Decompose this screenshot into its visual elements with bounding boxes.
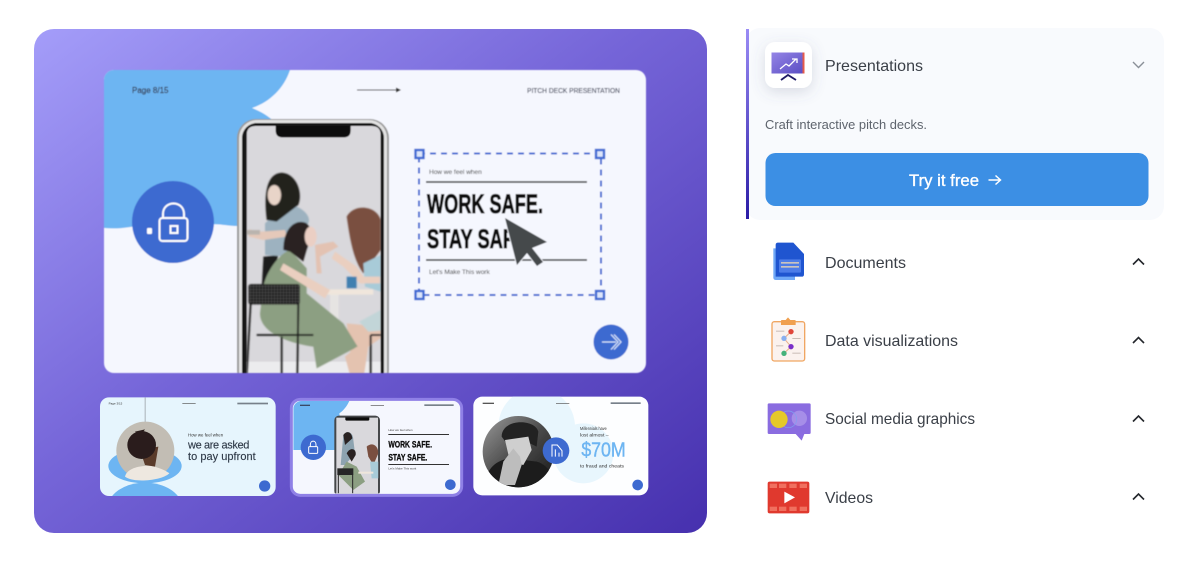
row: Social media graphics: Social media graphics <box>825 411 975 428</box>
notch <box>276 126 351 137</box>
thumbnail heading: we are asked <box>187 439 249 451</box>
arrow: header <box>357 88 401 92</box>
selection text: WORK SAFE. <box>427 189 543 219</box>
icon: padlock circle <box>132 181 214 263</box>
row: Videos: Videos <box>825 490 873 507</box>
thumbnail: asked to pay upfront <box>100 397 276 496</box>
standing woman <box>262 255 278 287</box>
button: Try it free: Try it free <box>909 172 979 190</box>
blue cloud shape <box>104 70 290 228</box>
icon: mouse cursor <box>505 218 547 266</box>
panel: expanded Presentations accordion <box>746 28 1164 220</box>
row: Documents <box>773 243 1144 280</box>
thumbnail: selected work safe slide: How we feel when <box>388 428 413 432</box>
row: Data visualizations <box>772 317 1144 361</box>
thumbnail: $70M lost to fraud: lost almost – <box>580 432 609 437</box>
arrow button <box>594 324 628 360</box>
thumbnail: selected work safe slide: STAY SAFE. <box>388 452 427 462</box>
selection text: How we feel when <box>429 169 482 176</box>
table <box>330 293 339 323</box>
icon: speech bubble <box>768 403 811 441</box>
thumbnail: selected work safe slide: Let's Make This work <box>388 466 417 470</box>
thumbnail: $70M lost to fraud: $70M <box>581 440 626 462</box>
icon: presentation board <box>765 42 812 88</box>
seated woman <box>260 250 358 368</box>
thumbnail: asked to pay upfront: Page 3/15 <box>109 402 123 406</box>
chevron <box>1133 62 1144 68</box>
thumbnail: $70M lost to fraud: Millennials have <box>580 426 607 431</box>
thumbnail: selected work safe slide: WORK SAFE. <box>388 439 432 449</box>
row: Documents: Documents <box>825 255 906 272</box>
description: Craft interactive pitch decks. <box>765 117 927 132</box>
phone with photo of three women <box>237 119 389 393</box>
icon: video film <box>768 482 809 513</box>
row: Data visualizations: Data visualizations <box>825 333 958 350</box>
panel: main slide <box>104 70 646 393</box>
slide header label: PITCH DECK PRESENTATION <box>527 88 620 95</box>
thumbnail: $70M lost to fraud: to fraud and cheats <box>580 464 624 469</box>
right woman <box>347 323 381 375</box>
chair <box>248 284 300 305</box>
button: Try it free <box>766 153 1148 206</box>
page number: Page 8/15 <box>132 86 169 95</box>
selection text: STAY SAF <box>427 224 514 254</box>
row: Social media graphics <box>768 403 1144 441</box>
thumbnail: $70M lost to fraud <box>473 388 648 495</box>
thumbnail: asked to pay upfront: to pay upfront <box>188 451 256 463</box>
icon: document <box>773 243 804 280</box>
text selection box <box>416 150 604 299</box>
panel: purple showcase background <box>34 29 707 533</box>
row: Videos <box>768 482 1144 513</box>
icon: clipboard chart <box>772 317 805 361</box>
selection text: Let's Make This work <box>429 269 490 276</box>
heading: Presentations: Presentations <box>825 58 923 75</box>
thumbnail: asked to pay upfront: How we feel when <box>188 432 224 437</box>
thumbnail: selected work safe slide <box>291 399 462 498</box>
selection text <box>426 169 587 276</box>
